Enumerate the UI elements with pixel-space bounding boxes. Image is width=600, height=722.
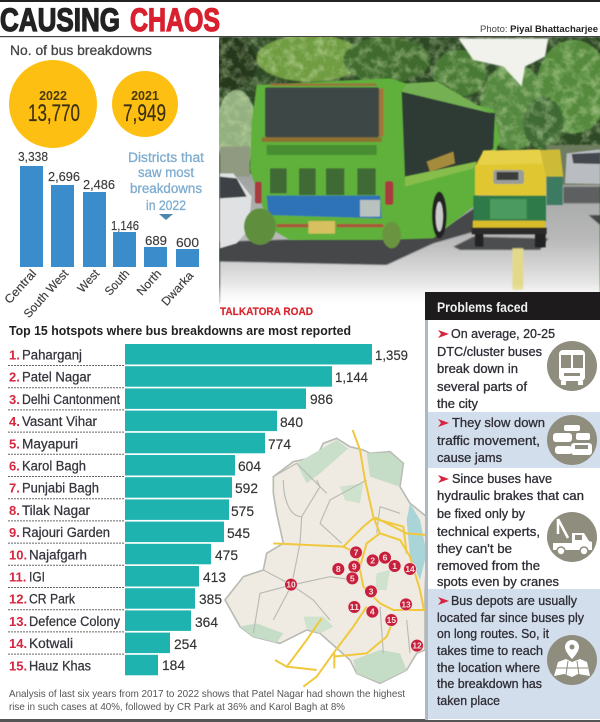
bar chart: districts: Central	[1, 267, 39, 306]
hotspot bar chart: Rajouri Garden	[22, 525, 110, 540]
problem 1 text: several parts of	[437, 379, 527, 394]
panel heading	[425, 292, 600, 320]
hotspot markers: 5	[350, 573, 355, 583]
hotspot bar chart: 15.	[9, 658, 27, 673]
hotspot markers: 11	[350, 602, 359, 612]
circle: 2022 total: 13,770	[28, 100, 80, 127]
hotspot bar chart: 364	[195, 614, 218, 630]
panel heading: Problems faced	[437, 300, 528, 315]
footnote: Analysis of last six years from 2017 to 2022 shows that Patel Nagar had shown the highest	[9, 688, 405, 700]
hotspot bar chart: 14.	[9, 636, 27, 651]
hotspot bar chart: 1.	[9, 348, 20, 362]
hotspot markers: 14	[405, 564, 415, 574]
photo: bus and auto-rickshaws on Talkatora Road	[203, 35, 600, 313]
hotspot bar chart: 5.	[9, 436, 20, 451]
hotspot bar chart: 8.	[9, 503, 20, 518]
problem 2 text	[437, 415, 545, 465]
hotspot bar chart: 592	[235, 480, 258, 496]
icon: tow truck	[547, 512, 597, 562]
hotspot bar chart: Kotwali	[29, 636, 73, 651]
problem 4 text: Bus depots are usually	[451, 593, 577, 608]
bar chart: districts: West	[74, 266, 103, 295]
hotspot bar chart: 604	[238, 458, 261, 474]
title: CHAOS	[130, 2, 220, 38]
hotspot bar chart: 6.	[9, 458, 20, 474]
hotspot bar chart: 12.	[9, 592, 27, 607]
hotspot bar chart: 4.	[9, 414, 20, 429]
bottom rule	[0, 719, 600, 722]
hotspot bar chart: Defence Colony	[29, 614, 120, 629]
map of Delhi hotspots	[225, 430, 427, 687]
hotspot bar chart: CR Park	[29, 592, 75, 607]
foliage texture	[219, 37, 600, 150]
hotspot markers: 10	[286, 580, 296, 590]
problem 2 text: cause jams	[437, 450, 502, 465]
hotspot bar chart: 2.	[9, 370, 20, 385]
label fade	[219, 286, 600, 304]
icon: traffic jam	[547, 415, 597, 465]
hotspot markers	[285, 546, 423, 652]
hotspot bar chart: Hauz Khas	[29, 658, 91, 673]
problem 3 text: spots even by cranes	[437, 574, 559, 589]
bar chart: districts: 2,696	[48, 170, 80, 184]
hotspot bar chart: Paharganj	[22, 348, 82, 362]
hotspot markers: 6	[383, 553, 388, 563]
problem 3 text: removed from the	[437, 558, 540, 573]
hotspot markers: 15	[387, 615, 396, 625]
problem 3 text: Since buses have	[452, 471, 552, 486]
hotspot bar chart: 774	[268, 436, 291, 452]
hotspot bar chart: 9.	[9, 525, 20, 540]
hotspot bar chart: Vasant Vihar	[22, 414, 97, 429]
problem 1 text: DTC/cluster buses	[437, 344, 542, 359]
hotspot bar chart: 840	[280, 414, 303, 430]
hotspot bar chart	[8, 344, 408, 675]
hotspot markers: 1	[392, 561, 397, 571]
hotspot bar chart: Punjabi Bagh	[22, 481, 99, 496]
hotspot bar chart: 3.	[9, 392, 20, 407]
problem 4 text: the location where	[437, 660, 540, 675]
problem 3 text: they can't be	[437, 541, 512, 556]
hotspot bar chart: 1,144	[335, 369, 368, 385]
hotspot bar chart: 986	[310, 391, 333, 407]
circle: 2021 total: 7,949	[123, 100, 166, 127]
problem 4 text: the breakdown has	[437, 676, 542, 691]
bar chart: districts: Dwarka	[158, 268, 196, 308]
hotspot markers: 9	[352, 562, 357, 572]
hotspot bar chart: 475	[215, 547, 238, 563]
callout: districts note: breakdowns	[130, 181, 202, 196]
problem 1 text: On average, 20-25	[451, 326, 555, 341]
hotspot bar chart: 254	[174, 636, 197, 652]
title: CAUSING	[0, 2, 120, 38]
bar chart: districts: North	[134, 267, 164, 298]
hotspot markers: 13	[401, 599, 411, 609]
bar chart: districts: South West	[21, 266, 72, 321]
problem 1 text: break down in	[437, 361, 518, 376]
problem 3 text	[437, 471, 584, 589]
hotspot bar chart: Najafgarh	[29, 547, 87, 562]
hotspot bar chart: IGI	[29, 570, 45, 584]
panel: problems faced	[425, 292, 600, 720]
hotspot bar chart: 7.	[9, 481, 20, 496]
hotspot bar chart: 10.	[9, 547, 27, 562]
bar chart: districts	[1, 150, 199, 321]
bar chart: districts: 689	[145, 234, 167, 248]
circle: 2021 total	[112, 71, 178, 137]
top rule	[0, 0, 600, 2]
problem 3 text: technical experts,	[437, 524, 540, 539]
footnote	[9, 688, 405, 713]
chart heading: no. of bus breakdowns: No. of bus breakdowns	[10, 42, 152, 58]
header rule	[0, 36, 600, 37]
problem 4 text: taken place	[437, 693, 500, 708]
hotspot bar chart: Patel Nagar	[22, 370, 91, 385]
icon: bus	[547, 341, 597, 391]
problem 4 text: located far since buses ply	[437, 610, 584, 625]
circle: 2021 total: 2021	[131, 89, 159, 103]
title	[0, 2, 220, 38]
callout: districts note	[128, 150, 204, 220]
hotspot bar chart: 11.	[9, 570, 26, 584]
icon: map pin	[547, 635, 597, 685]
problem 1 text	[437, 326, 555, 411]
photo credit: Photo: Piyal Bhattacharjee	[480, 24, 598, 35]
hotspot bar chart: Delhi Cantonment	[22, 392, 120, 407]
hotspot bar chart: Mayapuri	[22, 436, 78, 451]
problem 1 text: the city	[437, 396, 478, 411]
footnote: rise in such cases at 40%, followed by CR Park at 36% and Karol Bagh at 8%	[9, 701, 345, 713]
bar chart: districts: 3,338	[18, 150, 48, 164]
problem 4 text	[437, 593, 584, 708]
problem 2 text: traffic movement,	[437, 433, 540, 448]
hotspot bar chart: 1,359	[375, 347, 408, 363]
callout: districts note: Districts that	[128, 150, 204, 165]
problem 2 text: They slow down	[452, 415, 545, 430]
hotspot bar chart: 13.	[9, 614, 27, 629]
circle: 2022 total	[9, 60, 97, 148]
hotspot bar chart: 385	[199, 591, 222, 607]
hotspot bar chart: 545	[227, 525, 250, 541]
hotspot markers: 3	[369, 586, 374, 596]
hotspot markers: 7	[354, 547, 359, 557]
hotspots heading: Top 15 hotspots where bus breakdowns are most reported	[9, 323, 351, 338]
hotspot bar chart: 413	[203, 569, 226, 585]
bar chart: districts: 2,486	[83, 178, 115, 192]
problem 3 text: be fixed only by	[437, 506, 525, 521]
hotspot markers: 8	[336, 564, 341, 574]
hotspot markers: 2	[370, 555, 375, 565]
callout: districts note: in 2022	[146, 198, 186, 213]
circle: 2022 total: 2022	[39, 89, 67, 103]
bar chart: districts: South	[102, 267, 132, 298]
bar chart: districts: 1,146	[111, 219, 139, 233]
photo caption: TALKATORA ROAD	[220, 306, 313, 318]
bar chart: districts: 600	[176, 236, 199, 250]
hotspot bar chart: Tilak Nagar	[22, 503, 90, 518]
hotspot bar chart: Karol Bagh	[22, 458, 86, 474]
hotspot bar chart: 184	[162, 657, 185, 673]
hotspot bar chart: 575	[231, 503, 254, 519]
hotspot markers: 12	[412, 641, 422, 651]
problem 4 text: takes time to reach	[437, 643, 543, 658]
callout: districts note: saw most	[138, 165, 194, 180]
problem 3 text: hydraulic brakes that can	[437, 488, 584, 503]
problem 4 text: on long routes. So, it	[437, 626, 549, 641]
hotspot markers: 4	[370, 607, 375, 617]
